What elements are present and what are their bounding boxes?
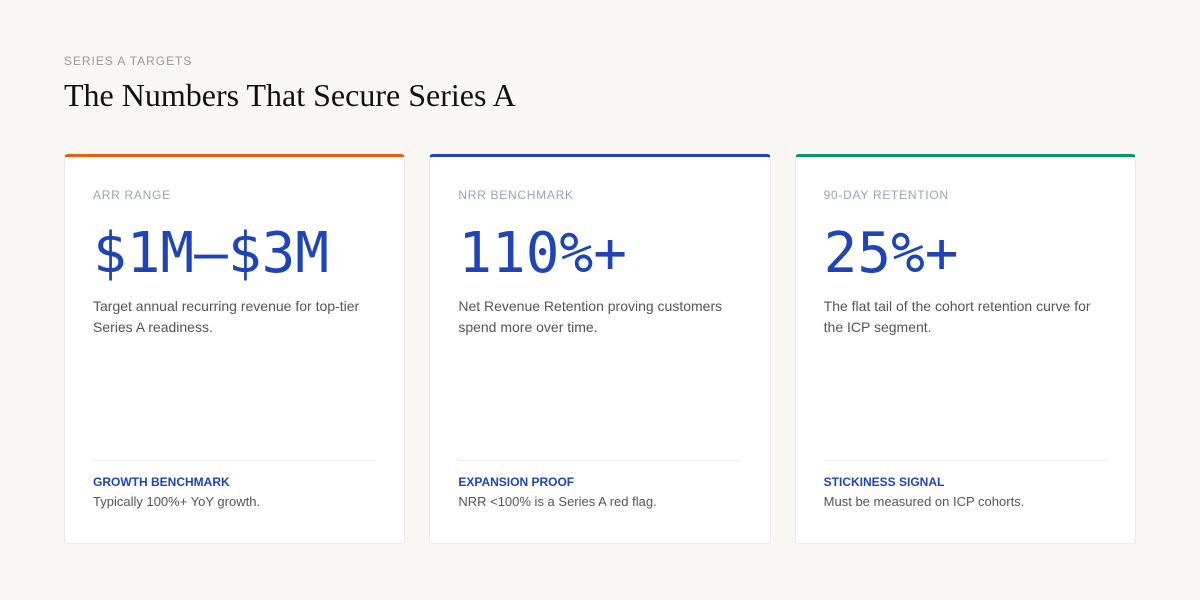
card label: ARR RANGE [93, 188, 171, 202]
card label: 90-DAY RETENTION [824, 188, 949, 202]
footer heading: GROWTH BENCHMARK [93, 475, 230, 489]
description: Net Revenue Retention proving customers spend more over time. [458, 298, 722, 335]
footer text: NRR <100% is a Series A red flag. [458, 494, 657, 509]
description: The flat tail of the cohort retention curve for the ICP segment. [824, 298, 1091, 335]
footer note [458, 460, 741, 520]
metric value: $1M—$3M [93, 221, 329, 286]
panel: 90-day retention [795, 154, 1136, 544]
metric value: 110%+ [458, 221, 627, 286]
footer text: Typically 100%+ YoY growth. [93, 494, 260, 509]
footer text: Must be measured on ICP cohorts. [824, 494, 1024, 509]
title: The Numbers That Secure Series A [64, 77, 516, 113]
footer note [824, 460, 1107, 520]
footer heading: EXPANSION PROOF [458, 475, 574, 489]
panel: NRR benchmark [429, 154, 771, 544]
footer heading: STICKINESS SIGNAL [824, 475, 944, 489]
description: Target annual recurring revenue for top-tier Series A readiness. [93, 298, 359, 335]
panel: ARR range [64, 154, 405, 544]
eyebrow label: SERIES A TARGETS [64, 54, 192, 68]
footer note [93, 460, 376, 520]
metric value: 25%+ [824, 221, 959, 286]
card label: NRR BENCHMARK [458, 188, 574, 202]
header [64, 54, 516, 113]
